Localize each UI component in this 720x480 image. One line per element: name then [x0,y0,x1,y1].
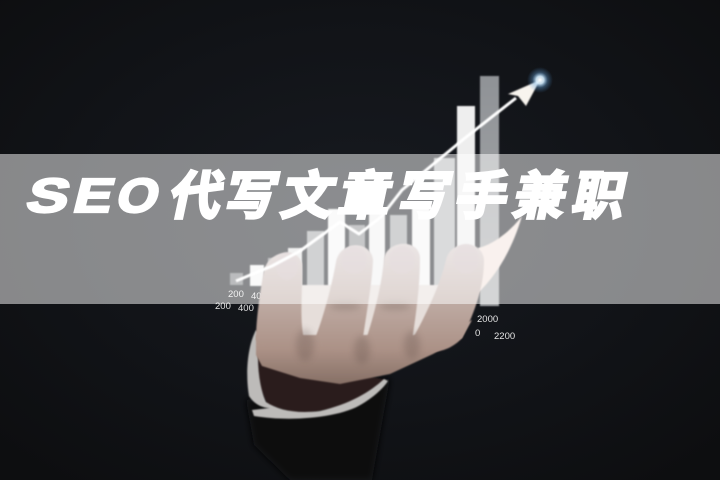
title: 文 [276,168,341,226]
rising trend arrow [236,80,540,281]
title: E [68,169,120,223]
shirt cuff [247,330,388,419]
white light between the fingers [296,285,470,365]
axis numbers: 2200 [494,331,515,342]
finger: ring [316,245,373,352]
finger: middle [366,244,420,354]
title: 写 [219,168,284,226]
hand [246,216,522,480]
axis numbers: 0 [475,328,480,339]
title: 章 [333,168,398,226]
axis numbers: 200 [215,301,231,312]
thumb edge behind the band [470,216,522,300]
fingernails [276,244,479,280]
axis numbers: 200 [228,289,244,300]
shadow inside the cuff [256,350,386,415]
knuckle shadows [296,302,420,364]
title: 职 [567,168,632,226]
axis numbers: 400 [238,303,254,314]
axis numbers: 400 [251,291,267,302]
title: S [21,169,76,222]
bar chart [230,76,499,306]
title: 写 [392,168,457,226]
finger: pinky [256,253,304,349]
axis numbers: 2000 [477,314,498,325]
finger: index [412,244,484,352]
title [21,168,632,226]
light flare [527,67,553,93]
suit sleeve [246,378,390,480]
translucent title band [0,154,720,304]
title: 手 [450,168,515,226]
title: 代 [164,168,229,226]
arrowhead [508,80,540,106]
title: 兼 [508,168,573,226]
palm [256,320,472,384]
axis numbers [215,289,515,342]
title: O [111,169,166,222]
